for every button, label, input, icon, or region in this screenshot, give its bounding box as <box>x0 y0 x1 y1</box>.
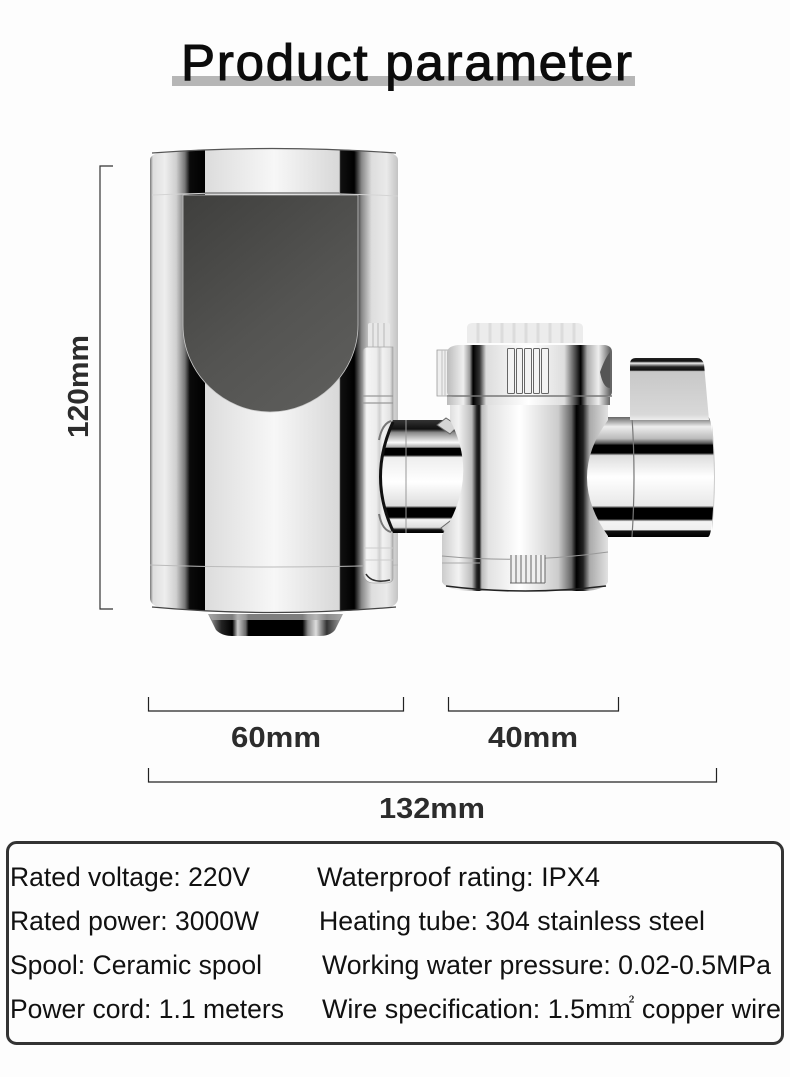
spec: rated power: Rated power: 3000W <box>10 906 259 936</box>
side tube <box>363 323 393 583</box>
spec: wire specification: Wire specification: 1.5m㎡ copper wire <box>322 987 781 1026</box>
main cylinder body <box>150 148 398 613</box>
panel frame <box>8 842 782 1044</box>
title underline <box>172 76 635 86</box>
spec: working water pressure: Working water pressure: 0.02-0.5MPa <box>322 950 771 980</box>
panel: specifications <box>8 842 782 1044</box>
title <box>172 34 635 91</box>
dimension: 60mm <box>148 697 404 754</box>
dimension: height 120mm <box>63 166 113 609</box>
spec: heating tube: Heating tube: 304 stainless steel <box>319 906 705 936</box>
valve handle <box>630 358 709 420</box>
dimension: 40mm <box>448 697 618 754</box>
collar <box>437 345 612 397</box>
spec: waterproof rating: Waterproof rating: IPX4 <box>317 862 600 892</box>
right pipe <box>585 417 715 537</box>
nozzle <box>208 614 343 636</box>
dimension: 40mm: 40mm <box>488 722 578 754</box>
central valve body <box>442 402 608 591</box>
dimension: 132mm <box>148 768 716 825</box>
ribbed cap <box>467 323 583 343</box>
spec: spool: Spool: Ceramic spool <box>10 950 262 980</box>
left connecting pipe <box>379 418 470 538</box>
title text: Product parameter <box>181 34 632 91</box>
spec: power cord: Power cord: 1.1 meters <box>10 994 284 1024</box>
dark display panel <box>183 195 358 412</box>
dimension: 132mm: 132mm <box>379 793 485 825</box>
neck ring <box>447 397 610 405</box>
product illustration: faucet water heater <box>150 148 715 636</box>
dimension: height 120mm: 120mm <box>63 335 95 438</box>
spec: rated voltage: Rated voltage: 220V <box>10 862 250 892</box>
dimension: 60mm: 60mm <box>231 722 321 754</box>
